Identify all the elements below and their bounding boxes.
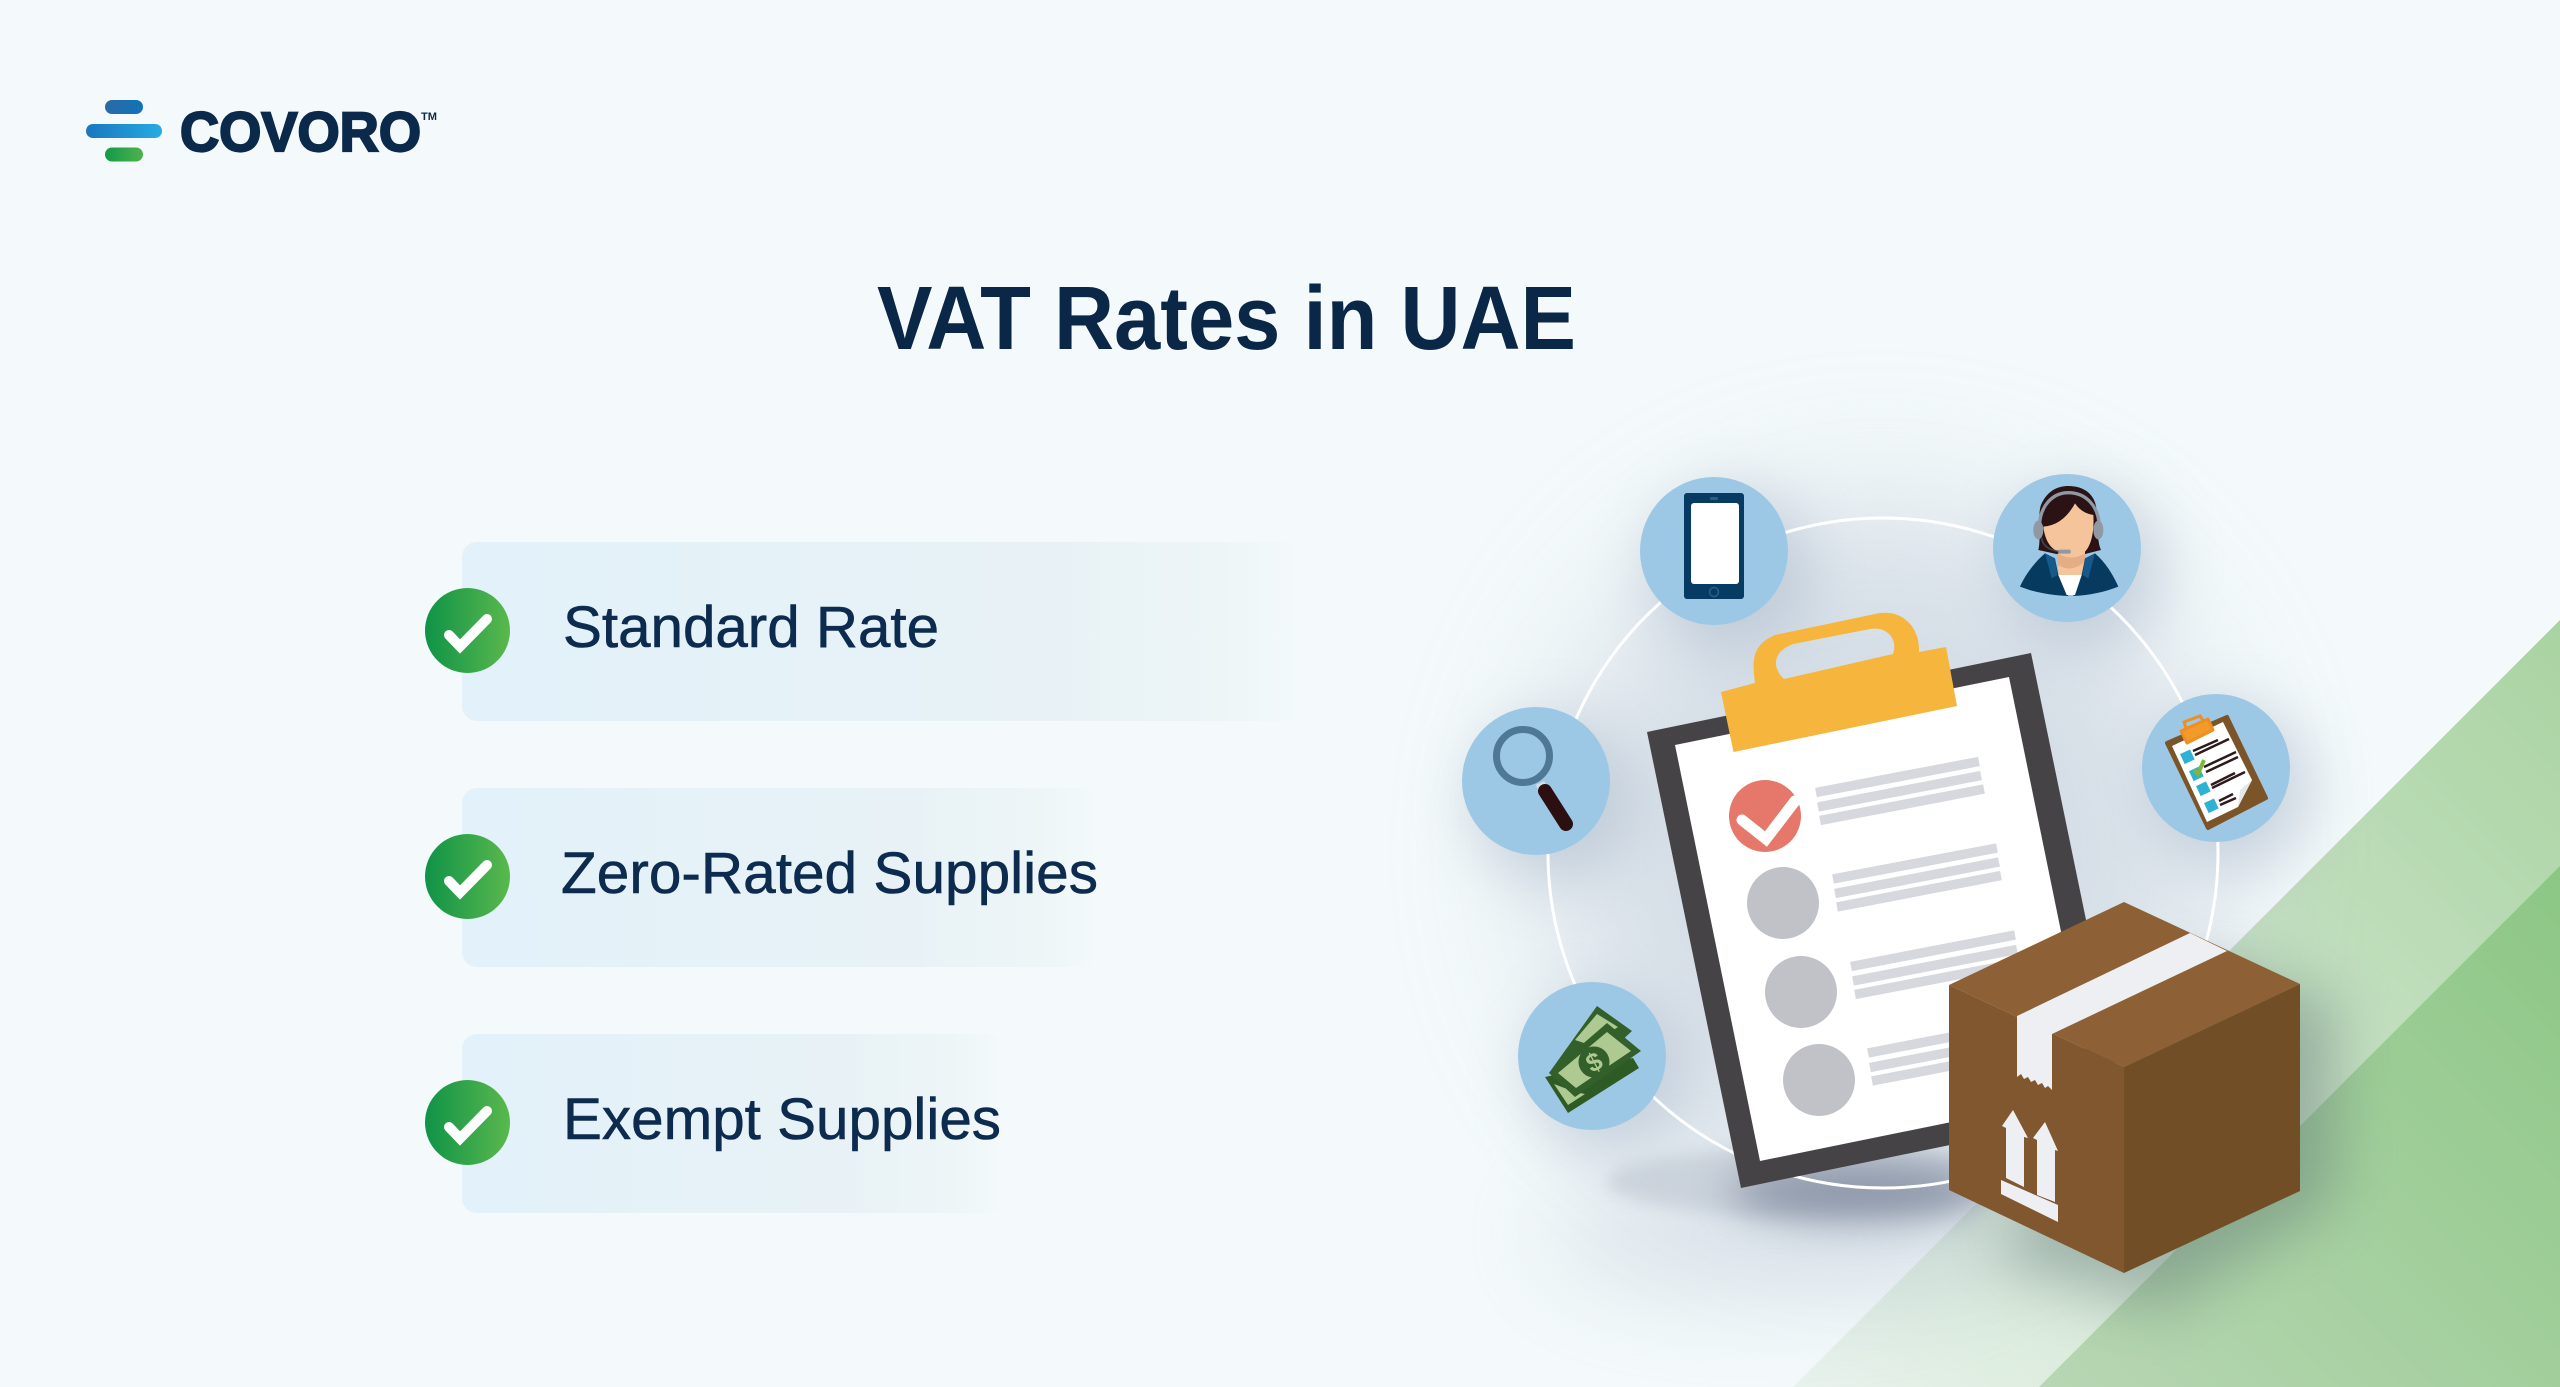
- board: [1647, 653, 2125, 1188]
- illustration: VAT checklist with parcel: [1462, 474, 2335, 1310]
- soft glow behind illustration: [1470, 485, 2335, 1310]
- green diagonal corner shapes: [1793, 620, 2560, 1387]
- logo wordmark: COVORO: [180, 100, 421, 163]
- check icon: [425, 588, 510, 673]
- pending item 2: [1765, 935, 2019, 1028]
- floor shadow: [1607, 1147, 2023, 1222]
- title: VAT Rates in UAE: [877, 269, 1576, 369]
- label: Standard Rate: [563, 595, 939, 660]
- checked item: [1729, 762, 1984, 852]
- check icon: [425, 1080, 510, 1165]
- pending item 1: [1747, 848, 2001, 939]
- paper: [1675, 677, 2094, 1161]
- icon: phone: [1640, 477, 1788, 625]
- right face: [2124, 984, 2300, 1273]
- icon: magnifying glass: [1462, 707, 1610, 855]
- trademark: TM: [421, 111, 437, 123]
- pill: Standard Rate: [462, 542, 1304, 721]
- top face: [1949, 902, 2300, 1067]
- clipboard: [1647, 613, 2125, 1188]
- logo mark: [86, 100, 162, 162]
- this-way-up arrows: [2001, 1110, 2058, 1222]
- pill: Exempt Supplies: [462, 1034, 1004, 1213]
- parcel box: [1949, 902, 2300, 1273]
- packing tape: [2017, 933, 2227, 1090]
- check icon: [425, 834, 510, 919]
- icon: banknotes: [1518, 982, 1666, 1130]
- pending item 3: [1783, 1022, 2036, 1116]
- icon: banknotes: $: [1581, 1045, 1608, 1079]
- label: Zero-Rated Supplies: [561, 841, 1098, 906]
- orbit ring: [1548, 518, 2218, 1188]
- left face: [1949, 985, 2124, 1273]
- label: Exempt Supplies: [563, 1087, 1001, 1152]
- logo: Covoro: [86, 100, 437, 163]
- list item: Exempt Supplies: [425, 1034, 1004, 1213]
- list item: Standard Rate: [425, 542, 1304, 721]
- list item: Zero-Rated Supplies: [425, 788, 1100, 967]
- icon: small checklist: [2142, 694, 2290, 842]
- icon: support agent: [1993, 474, 2141, 622]
- pill: Zero-Rated Supplies: [462, 788, 1100, 967]
- clip: [1721, 613, 1957, 752]
